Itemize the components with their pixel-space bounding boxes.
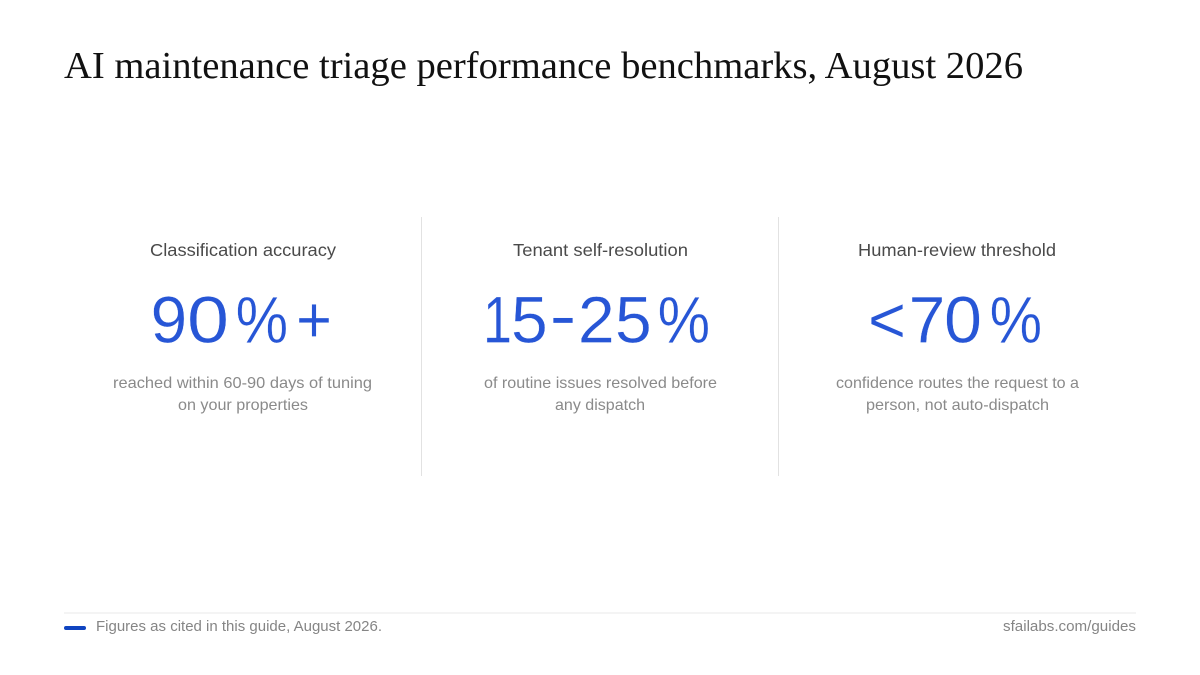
footer url: sfailabs.com/guides	[1003, 619, 1136, 635]
big number: 9	[150, 282, 187, 356]
big number: %	[990, 282, 1042, 356]
description: person, not auto-dispatch	[866, 397, 1049, 414]
footer source note: Figures as cited in this guide, August 2026.	[96, 619, 382, 635]
big number: %	[658, 282, 710, 356]
big number: 7	[909, 282, 945, 356]
big number: 5	[615, 282, 652, 356]
description: any dispatch	[555, 397, 645, 414]
description: of routine issues resolved before	[484, 375, 717, 392]
panel: classification accuracy	[113, 240, 372, 414]
big number	[483, 278, 710, 356]
panel label: Human-review threshold	[858, 240, 1056, 260]
big number: 2	[578, 282, 615, 356]
description: confidence routes the request to a	[836, 375, 1079, 392]
footer accent mark	[64, 626, 86, 630]
description: reached within 60-90 days of tuning	[113, 375, 372, 392]
description	[836, 375, 1079, 414]
big number: -	[550, 278, 576, 352]
description	[484, 375, 717, 414]
big number: 0	[944, 282, 982, 356]
big number: +	[296, 282, 332, 356]
big number: 0	[187, 282, 229, 356]
panel label: Classification accuracy	[150, 240, 336, 260]
description	[113, 375, 372, 414]
big number: 5	[511, 282, 548, 356]
big number	[868, 282, 1042, 356]
title: AI maintenance triage performance benchmarks, August 2026	[64, 45, 1023, 87]
big number	[150, 282, 332, 356]
description: on your properties	[178, 397, 308, 414]
panel label: Tenant self-resolution	[513, 240, 688, 260]
big number: %	[236, 282, 288, 356]
big number: 1	[483, 282, 512, 356]
big number: <	[868, 282, 906, 356]
panel: human-review threshold	[836, 240, 1079, 414]
panel: tenant self-resolution	[483, 240, 717, 414]
